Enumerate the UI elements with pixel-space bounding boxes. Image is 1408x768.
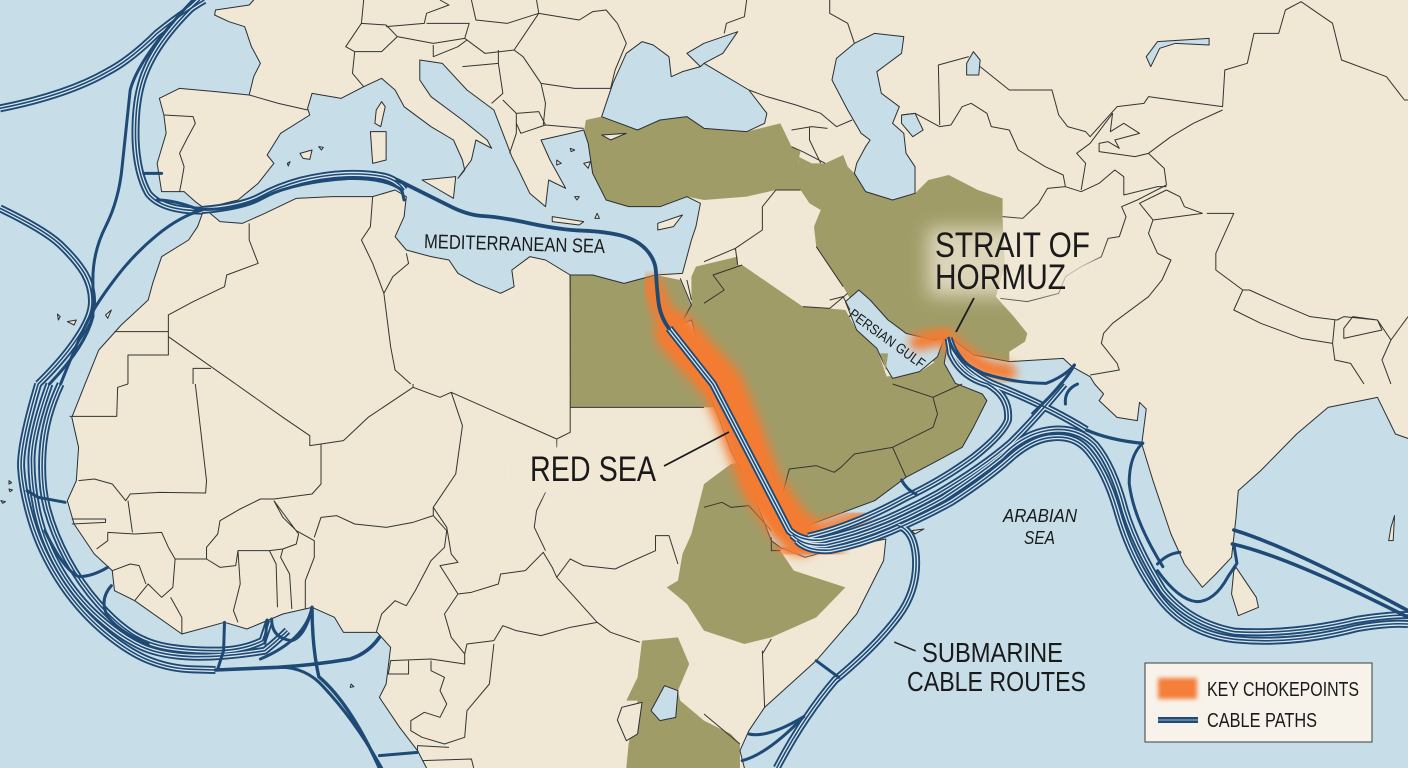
legend: [1145, 663, 1372, 742]
label: Arabian Sea: ARABIAN: [1002, 506, 1078, 526]
label: Persian Gulf: PERSIAN GULF: [846, 305, 928, 371]
label: Strait of Hormuz with leader: HORMUZ: [935, 258, 1066, 297]
label: Red Sea with leader: RED SEA: [530, 450, 657, 489]
borders: Arabia and East Africa: [704, 384, 962, 744]
borders: Central Asia, Middle East, South Asia: [704, 0, 1408, 384]
highlighted countries: [569, 117, 1027, 768]
glow: Red Sea: [632, 279, 860, 553]
label: Submarine Cable Routes: [907, 637, 1086, 697]
label: Arabian Sea: SEA: [1024, 528, 1055, 548]
legend swatch: cable paths: [1158, 717, 1198, 723]
glow: Strait of Hormuz: [918, 336, 1008, 372]
borders: West and Central Africa: [70, 384, 704, 768]
label: Red Sea with leader: [524, 432, 729, 489]
legend text: cable paths: CABLE PATHS: [1207, 710, 1317, 732]
label: Strait of Hormuz with leader: STRAIT OF: [935, 226, 1090, 265]
chokepoint highlights: orange glow: [632, 279, 1008, 553]
label: Submarine Cable Routes: CABLE ROUTES: [907, 666, 1086, 697]
legend swatch: key chokepoints: [1158, 678, 1197, 699]
label: Submarine Cable Routes: SUBMARINE: [922, 637, 1063, 668]
islands: [1, 102, 1395, 687]
label: Mediterranean Sea: MEDITERRANEAN SEA: [424, 231, 606, 258]
label: Arabian Sea: [1002, 506, 1078, 548]
legend text: key chokepoints: KEY CHOKEPOINTS: [1207, 679, 1359, 701]
label: Strait of Hormuz with leader: [928, 226, 1096, 332]
borders: Europe, North Africa: [114, 0, 691, 384]
